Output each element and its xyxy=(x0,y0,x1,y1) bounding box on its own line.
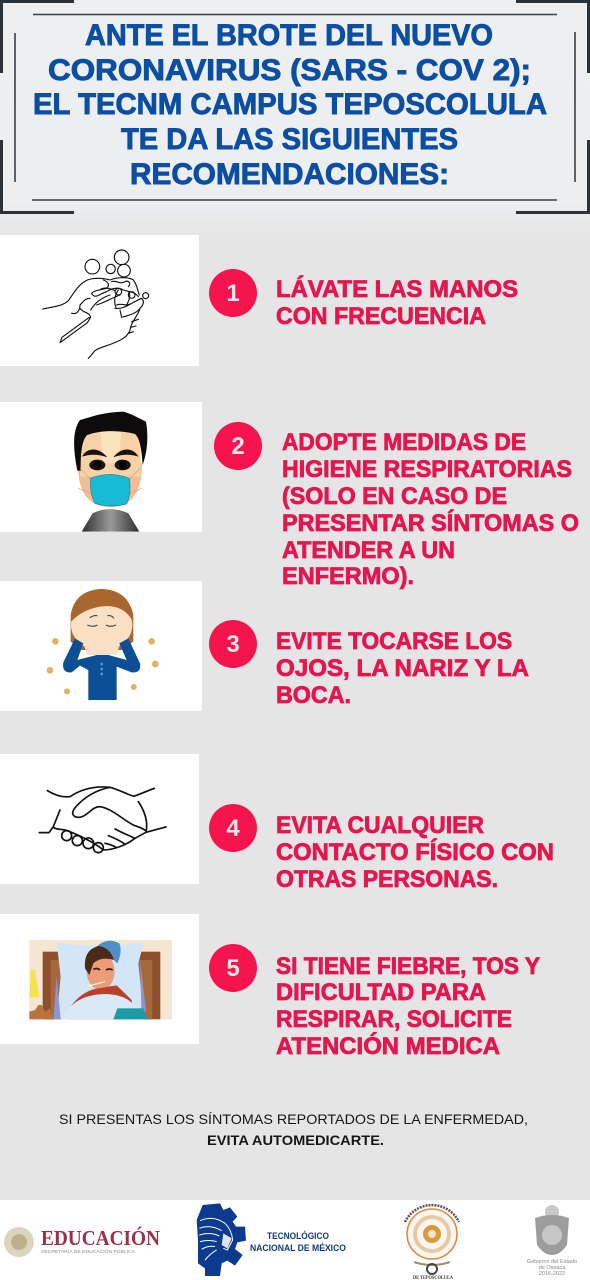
step 5 text: SI TIENE FIEBRE, TOS Y xyxy=(276,953,540,980)
logo: Educación: SECRETARÍA DE EDUCACIÓN PÚBLICA xyxy=(41,1248,135,1254)
icon: washing hands xyxy=(43,250,149,358)
panel: step 1 hand washing image xyxy=(0,235,199,366)
icon: woman touching her face xyxy=(47,589,159,700)
logo: Tecnológico Nacional de México: NACIONAL DE MÉXICO xyxy=(250,1243,346,1254)
step 2 text: HIGIENE RESPIRATORIAS xyxy=(282,456,572,483)
closing note xyxy=(59,1111,528,1148)
closing note: EVITA AUTOMEDICARTE. xyxy=(207,1132,384,1148)
step 3 text: BOCA. xyxy=(276,682,351,709)
title xyxy=(33,19,547,191)
step 5 number badge: 5 xyxy=(226,955,240,982)
step 4 text: CONTACTO FÍSICO CON xyxy=(276,838,554,866)
step 1 number badge xyxy=(209,269,257,317)
icon: sick man in bed xyxy=(29,940,172,1019)
title: TE DA LAS SIGUIENTES xyxy=(121,123,458,156)
step 2 number badge xyxy=(214,422,262,470)
step 5 text: RESPIRAR, SOLICITE xyxy=(276,1006,512,1033)
step 4 text: OTRAS PERSONAS. xyxy=(276,866,498,893)
step 2 text: PRESENTAR SÍNTOMAS O xyxy=(282,509,579,537)
step 5 number badge xyxy=(209,944,257,992)
step 1 number badge: 1 xyxy=(226,280,240,307)
step 1 text xyxy=(276,275,518,330)
step 1 text: LÁVATE LAS MANOS xyxy=(276,275,518,303)
step 3 text: EVITE TOCARSE LOS xyxy=(276,628,512,655)
step 4 number badge xyxy=(209,804,257,852)
logo: Instituto Tecnológico Superior de Teposcolula xyxy=(405,1205,459,1280)
logo: Educación xyxy=(4,1226,160,1257)
step 2 number badge: 2 xyxy=(231,433,245,460)
icon: man wearing face mask xyxy=(74,412,147,532)
step 4 text: EVITA CUALQUIER xyxy=(276,812,484,839)
panel: step 5 sick in bed image xyxy=(0,914,199,1044)
footer logo band xyxy=(0,1200,590,1280)
step 2 text: ATENDER A UN xyxy=(282,537,455,564)
closing note: SI PRESENTAS LOS SÍNTOMAS REPORTADOS DE LA ENFERMEDAD, xyxy=(59,1111,528,1127)
step 2 text: (SOLO EN CASO DE xyxy=(282,483,507,510)
step 4 number badge: 4 xyxy=(226,815,240,842)
logo: Gobierno de Oaxaca: 2016-2022 xyxy=(539,1271,565,1277)
logo: Gobierno de Oaxaca: de Oaxaca xyxy=(539,1265,566,1271)
icon: handshake xyxy=(39,787,166,853)
panel: step 3 face touching image xyxy=(0,581,202,711)
header panel xyxy=(0,0,590,235)
step 3 number badge xyxy=(209,620,257,668)
title: CORONAVIRUS (SARS - COV 2); xyxy=(48,54,531,87)
logo: Tecnológico Nacional de México xyxy=(197,1203,346,1276)
step 3 text: OJOS, LA NARIZ Y LA xyxy=(276,655,529,682)
step 2 text: ENFERMO). xyxy=(282,563,414,590)
step 1 text: CON FRECUENCIA xyxy=(276,303,486,330)
step 3 number badge: 3 xyxy=(226,631,240,658)
panel: step 4 handshake image xyxy=(0,754,199,884)
panel: step 2 face mask image xyxy=(0,402,202,532)
step 2 text xyxy=(282,429,579,590)
step 4 text xyxy=(276,812,554,893)
logo: Tecnológico Nacional de México: TECNOLÓGICO xyxy=(267,1230,329,1242)
step 5 text: ATENCIÓN MEDICA xyxy=(276,1032,500,1060)
logo: Educación: EDUCACIÓN xyxy=(41,1226,160,1250)
step 5 text xyxy=(276,953,540,1060)
title: RECOMENDACIONES: xyxy=(130,158,449,191)
step 2 text: ADOPTE MEDIDAS DE xyxy=(282,429,526,456)
title: EL TECNM CAMPUS TEPOSCOLULA xyxy=(33,88,547,121)
step 5 text: DIFICULTAD PARA xyxy=(276,979,486,1006)
step 3 text xyxy=(276,628,529,709)
logo: Gobierno de Oaxaca: Gobierno del Estado xyxy=(527,1259,577,1265)
title: ANTE EL BROTE DEL NUEVO xyxy=(85,19,493,52)
logo: Gobierno de Oaxaca xyxy=(527,1205,577,1277)
